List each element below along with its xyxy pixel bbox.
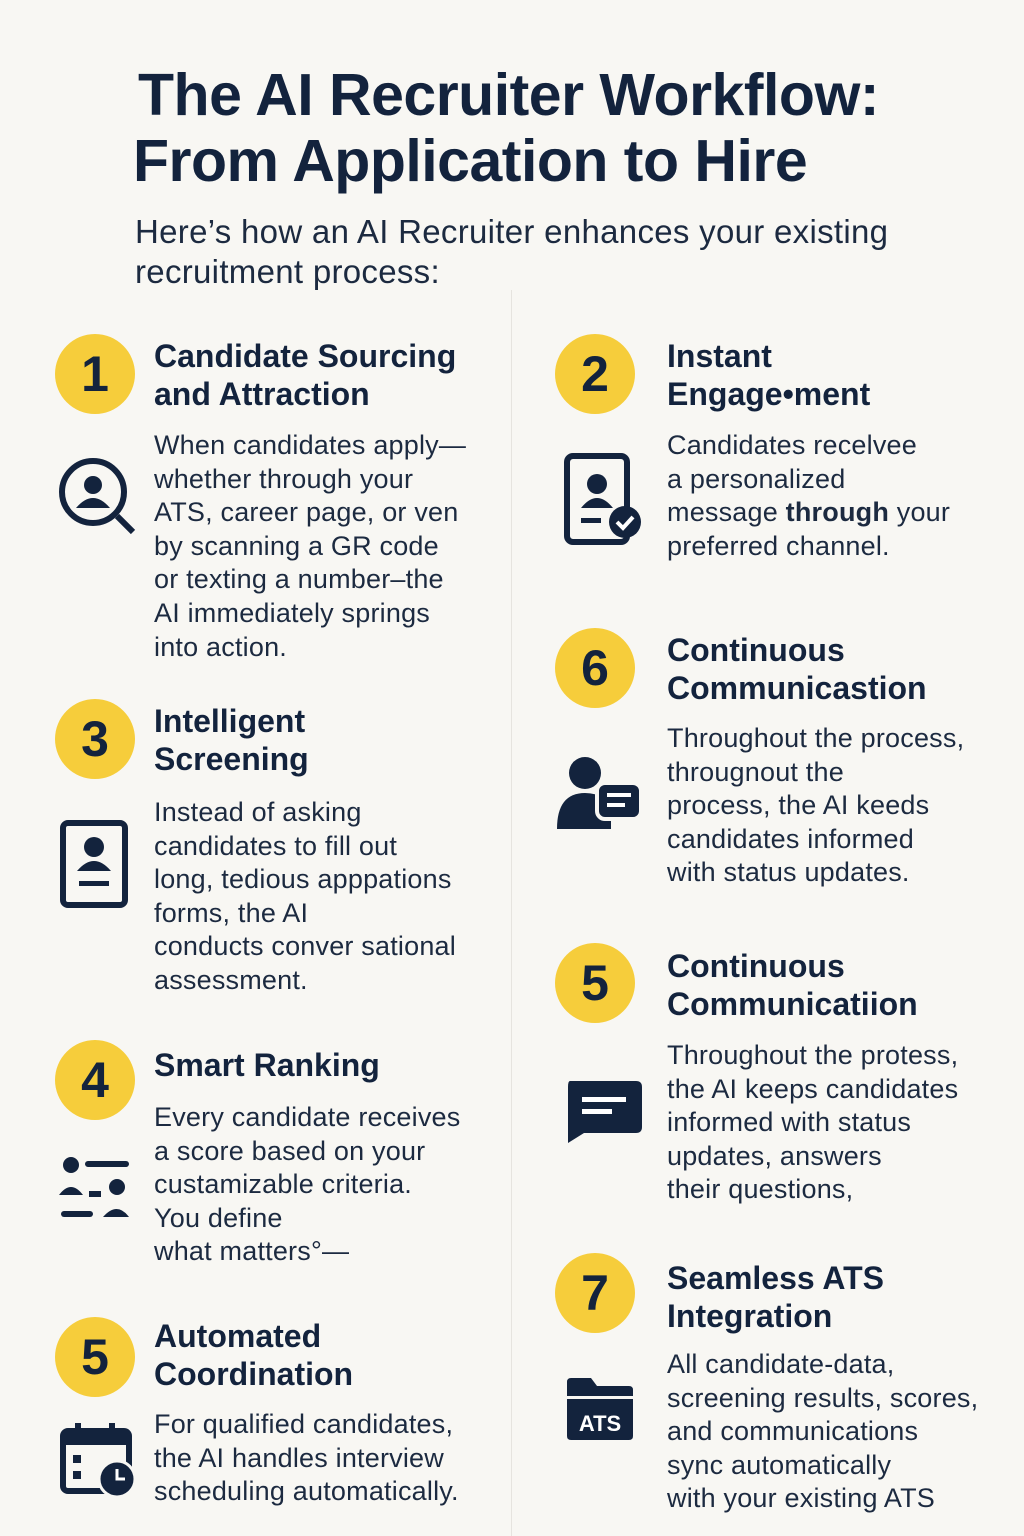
body 4: custamizable criteria. (154, 1169, 412, 1199)
body 3: conducts conver sational (154, 931, 456, 961)
heading 6 (667, 632, 927, 706)
body 7: All candidate-data, (667, 1349, 894, 1379)
body 7: screening results, scores, (667, 1383, 978, 1413)
step 6 (555, 628, 964, 887)
title: The AI Recruiter Workflow: (138, 62, 879, 128)
badge 4 (55, 1040, 135, 1120)
body 6: Throughout the process, (667, 723, 964, 753)
body 5b: the AI handles interview (154, 1443, 444, 1473)
icon: id card (60, 820, 128, 908)
heading 5b: Coordination (154, 1356, 353, 1392)
badge 3: 3 (81, 711, 109, 767)
icon: ATS folder: ATS (579, 1411, 621, 1436)
body 5b: For qualified candidates, (154, 1409, 453, 1439)
body 2: preferred channel. (667, 531, 890, 561)
badge 2: 2 (581, 346, 609, 402)
step 1 (55, 334, 466, 662)
body 5: the AI keeps candidates (667, 1074, 958, 1104)
body 2: message through your (667, 497, 950, 527)
body 5 (667, 1040, 958, 1204)
heading 7: Integration (667, 1298, 832, 1334)
body 4: You define (154, 1203, 283, 1233)
title: From Application to Hire (133, 128, 807, 194)
badge 2 (555, 334, 635, 414)
heading 4: Smart Ranking (154, 1047, 380, 1083)
badge 3 (55, 699, 135, 779)
heading 3: Intelligent (154, 703, 305, 739)
heading 1: and Attraction (154, 376, 370, 412)
body 3: candidates to fill out (154, 831, 397, 861)
subtitle: Here’s how an AI Recruiter enhances your existing recruitment process: (135, 213, 888, 290)
body 1: When candidates apply— (154, 430, 466, 460)
badge 5: 5 (581, 955, 609, 1011)
body 5: Throughout the protess, (667, 1040, 958, 1070)
icon: person chat (557, 757, 639, 829)
body 7 (667, 1349, 978, 1513)
heading 1: Candidate Sourcing (154, 338, 456, 374)
body 6: candidates informed (667, 824, 914, 854)
body 1: into action. (154, 632, 287, 662)
heading 6: Communicastion (667, 670, 927, 706)
body 2 (667, 430, 950, 561)
body 1 (154, 430, 466, 662)
body 5b: scheduling automatically. (154, 1476, 459, 1506)
heading 3: Screening (154, 741, 309, 777)
body 1: whether through your (154, 464, 413, 494)
heading 2: Engage•ment (667, 376, 870, 412)
body 6: througnout the (667, 757, 844, 787)
heading 7: Seamless ATS (667, 1260, 884, 1296)
heading 5: Communicatiion (667, 986, 918, 1022)
body 7: sync automatically (667, 1450, 891, 1480)
badge 1 (55, 334, 135, 414)
body 3: assessment. (154, 965, 308, 995)
heading 2 (667, 338, 870, 412)
heading 6: Continuous (667, 632, 845, 668)
body 6: process, the AI keeds (667, 790, 929, 820)
icon: calendar clock (60, 1423, 134, 1496)
heading 5 (667, 948, 918, 1022)
body 5b (154, 1409, 459, 1506)
body 2: a personalized (667, 464, 845, 494)
step 2 (555, 334, 950, 561)
step 7 (555, 1253, 978, 1513)
body 3 (154, 797, 456, 995)
badge 7: 7 (581, 1265, 609, 1321)
badge 4: 4 (81, 1052, 109, 1108)
icon: ranking list (59, 1157, 129, 1217)
step 3 (55, 699, 456, 995)
step 5 left (55, 1317, 459, 1506)
heading 5b (154, 1318, 353, 1392)
title (133, 62, 879, 194)
badge 6 (555, 628, 635, 708)
body 1: ATS, career page, or ven (154, 497, 458, 527)
heading 5: Continuous (667, 948, 845, 984)
icon: profile check (564, 453, 641, 545)
heading 5b: Automated (154, 1318, 321, 1354)
badge 6: 6 (581, 640, 609, 696)
body 4: what matters°— (154, 1236, 349, 1266)
body 7: with your existing ATS (667, 1483, 935, 1513)
body 3: Instead of asking (154, 797, 362, 827)
badge 5b (55, 1317, 135, 1397)
body 2: Candidates recelvee (667, 430, 917, 460)
icon: chat bubble (568, 1081, 642, 1143)
heading 7 (667, 1260, 884, 1334)
icon: ATS folder (567, 1378, 633, 1440)
heading 3 (154, 703, 309, 777)
body 1: by scanning a GR code (154, 531, 439, 561)
body 3: forms, the AI (154, 898, 308, 928)
body 6 (667, 723, 964, 887)
body 4: Every candidate receives (154, 1102, 460, 1132)
heading 2: Instant (667, 338, 772, 374)
step 4 (55, 1040, 460, 1266)
body 6: with status updates. (667, 857, 910, 887)
body 4: a score based on your (154, 1136, 425, 1166)
body 5: their questions, (667, 1174, 853, 1204)
body 1: AI immediately springs (154, 598, 430, 628)
body 1: or texting a number–the (154, 564, 444, 594)
icon: search person (59, 458, 136, 534)
badge 5b: 5 (81, 1329, 109, 1385)
heading 1 (154, 338, 456, 412)
body 3: long, tedious apppations (154, 864, 452, 894)
step 5 right (555, 943, 958, 1204)
body 5: updates, answers (667, 1141, 882, 1171)
body 5: informed with status (667, 1107, 911, 1137)
badge 5 (555, 943, 635, 1023)
body 4 (154, 1102, 460, 1266)
badge 7 (555, 1253, 635, 1333)
body 7: and communications (667, 1416, 918, 1446)
badge 1: 1 (81, 346, 109, 402)
